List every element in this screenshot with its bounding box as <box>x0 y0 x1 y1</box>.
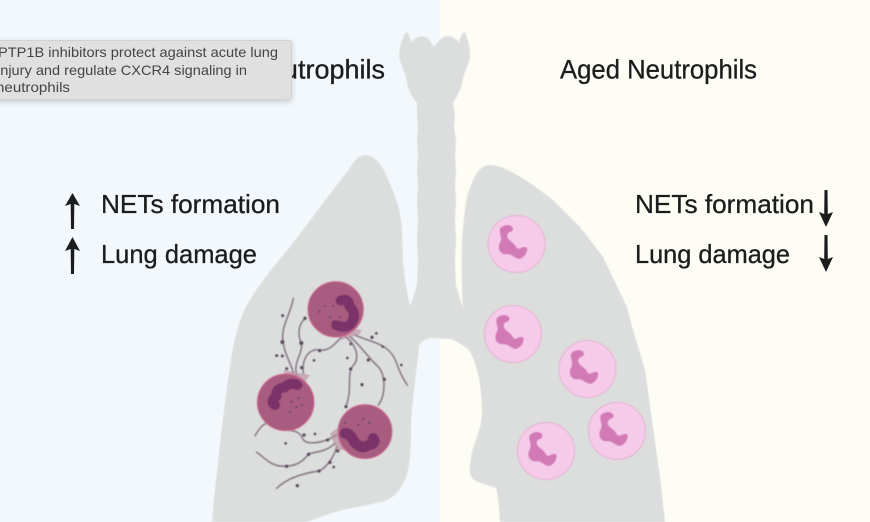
heading: Aged Neutrophils: Aged Neutrophils <box>560 54 757 84</box>
label: NETs formation: NETs formation <box>101 189 280 219</box>
panel: right background <box>440 0 870 522</box>
aged neutrophil 4 <box>588 402 646 460</box>
heading: left neutrophils: Neutrophils <box>248 54 385 84</box>
NET-forming neutrophils <box>255 282 407 488</box>
trachea <box>399 32 475 330</box>
label: NETs formation: NETs formation <box>635 189 814 219</box>
aged neutrophil 2 <box>484 306 542 362</box>
neutrophil 2 <box>257 374 314 431</box>
label: Lung damage: Lung damage <box>635 239 790 269</box>
left lung <box>212 155 432 522</box>
NET fibres <box>255 298 407 488</box>
tooltip: injury and regulate CXCR4 signaling in <box>0 63 247 78</box>
neutrophil 3 <box>338 405 392 459</box>
arrow down: Lung damage <box>819 235 833 272</box>
lungs and trachea silhouette <box>212 32 665 522</box>
NET granule dots <box>275 314 403 487</box>
tooltip: PTP1B inhibitors protect against acute lung <box>0 45 278 60</box>
neutrophil 1 <box>308 282 363 337</box>
aged neutrophil 3 <box>559 340 616 398</box>
tooltip <box>0 40 292 100</box>
aged neutrophil 1 <box>488 216 545 272</box>
arrow up: Lung damage <box>65 237 80 274</box>
panel: left background <box>0 0 440 522</box>
healthy neutrophils <box>484 216 646 480</box>
aged neutrophil 5 <box>518 422 574 480</box>
arrow down: NETs formation <box>819 190 833 227</box>
right lung <box>430 165 665 522</box>
fibre attachment bursts <box>283 327 362 450</box>
effects list: right <box>635 189 833 272</box>
effects list: left <box>65 189 280 274</box>
arrow up: NETs formation <box>65 193 80 229</box>
label: Lung damage: Lung damage <box>101 239 257 269</box>
